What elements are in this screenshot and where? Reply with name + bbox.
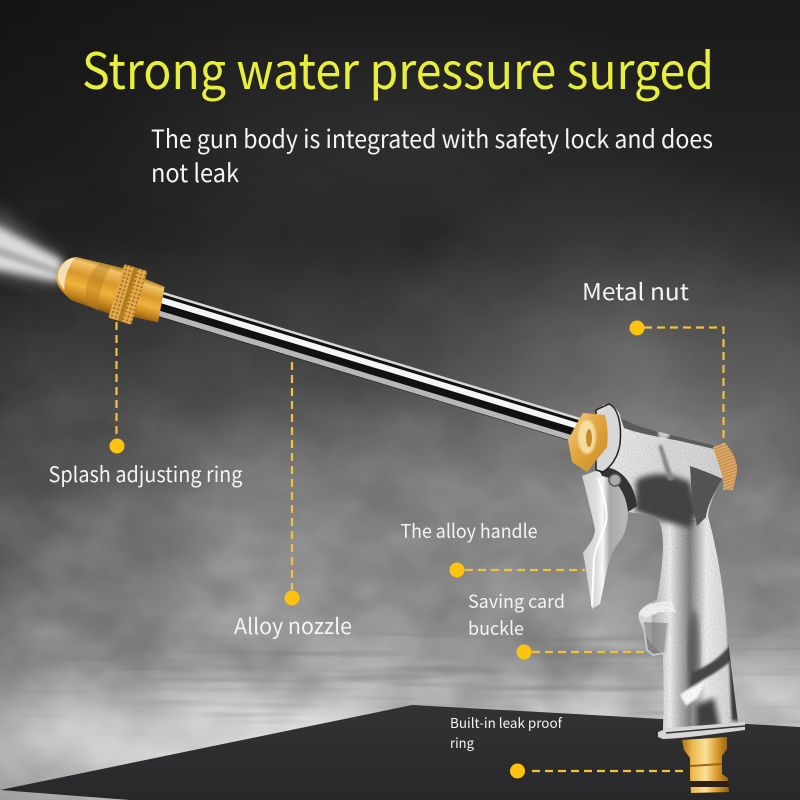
callout: built-in leak proof ring: ring [450,732,474,752]
callout: saving card buckle: Saving card [468,588,565,614]
brass hex nut [568,413,608,472]
callout: splash adjusting ring [48,322,243,489]
rear recess [690,466,723,526]
top edge shadow [620,416,714,449]
callout: the alloy handle [400,517,585,578]
saving card buckle wire [643,622,668,655]
callout: saving card buckle: buckle [468,615,524,641]
callout: built-in leak proof ring [450,712,688,778]
spray of water from nozzle [0,205,62,284]
knurled brass end cap [713,443,737,490]
brass hose connector [682,737,729,793]
title: Strong water pressure surged [82,32,714,104]
grip details [690,645,732,686]
silver collar behind nut [596,404,621,472]
callout: alloy nozzle: Alloy nozzle [234,609,352,641]
callout: metal nut [582,273,724,445]
lower grip [652,520,742,735]
subtitle text block: The gun body is integrated with safety lock and does [151,120,713,156]
callout: the alloy handle: The alloy handle [400,517,538,544]
flange [658,722,745,739]
subtitle text block: not leak [151,154,239,190]
trigger [582,467,637,609]
floor: dark slab in the foreground [0,705,800,800]
callout: splash adjusting ring: Splash adjusting ring [48,459,243,489]
gun body [590,400,745,740]
callout: alloy nozzle [234,362,352,641]
callout: saving card buckle [468,588,650,660]
callout: built-in leak proof ring: Built-in leak proof [450,712,563,732]
brass spray head [49,246,171,332]
callout: metal nut: Metal nut [582,273,689,307]
metal tube [156,292,581,442]
spray gun [49,246,745,793]
dark reflection in the body [635,474,698,528]
subtitle text block [151,120,713,190]
